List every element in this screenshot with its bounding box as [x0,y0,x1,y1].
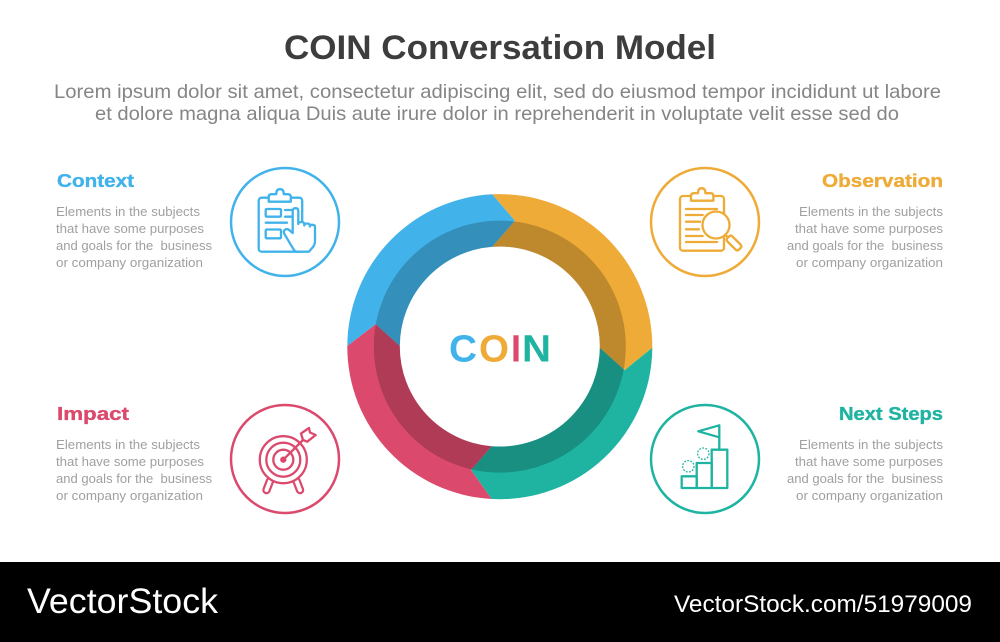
center label COIN: N [522,328,551,370]
ring segment: impact [347,324,492,499]
icon: clipboard with hand [231,168,339,276]
text block: next steps: or company organization [796,489,943,503]
text block: observation: and goals for the business [787,239,943,253]
text block: observation: that have some purposes [795,222,943,236]
text block: context: and goals for the business [56,239,212,253]
center label COIN: I [511,328,521,370]
text block: context: Elements in the subjects [56,205,200,219]
text block: impact: that have some purposes [56,455,204,469]
text block: next steps [787,438,943,503]
text block: impact: and goals for the business [56,472,212,486]
panel: next steps [651,404,943,513]
footer logo: VectorStock [27,582,219,621]
footer bar [0,562,1000,642]
heading: observation: Observation [822,171,943,191]
title: COIN Conversation Model [284,29,716,67]
ring inner dark band [387,234,613,460]
footer image id: VectorStock.com/51979009 [674,591,972,618]
center label COIN: C [449,328,477,370]
center label COIN [449,328,551,370]
text block: observation [787,205,943,270]
subtitle: Lorem ipsum dolor sit amet, consectetur adipiscing elit, sed do eiusmod tempor incididunt ut labore [54,81,941,103]
text block: impact: Elements in the subjects [56,438,200,452]
panel: context [56,168,339,276]
heading: impact: Impact [57,404,129,424]
text block: context [56,205,212,270]
text block: impact [56,438,212,503]
subtitle: et dolore magna aliqua Duis aute irure dolor in reprehenderit in voluptate velit esse sed do [95,103,899,125]
subtitle [54,81,941,125]
text block: impact: or company organization [56,489,203,503]
text block: observation: Elements in the subjects [799,205,943,219]
text block: observation: or company organization [796,256,943,270]
heading: next steps: Next Steps [839,404,943,424]
heading: context: Context [57,171,134,191]
ring segment: context [347,194,515,346]
icon: target with arrow [231,405,339,513]
text block: context: or company organization [56,256,203,270]
icon: clipboard with magnifier [651,168,759,276]
text block: next steps: and goals for the business [787,472,943,486]
icon: steps with flag [651,405,759,513]
ring segment: next steps [471,348,652,499]
text block: next steps: Elements in the subjects [799,438,943,452]
panel: observation [651,168,943,276]
text block: next steps: that have some purposes [795,455,943,469]
center label COIN: O [479,328,509,370]
ring diagram [347,194,652,499]
ring segment: observation [492,194,652,370]
text block: context: that have some purposes [56,222,204,236]
panel: impact [56,404,339,513]
